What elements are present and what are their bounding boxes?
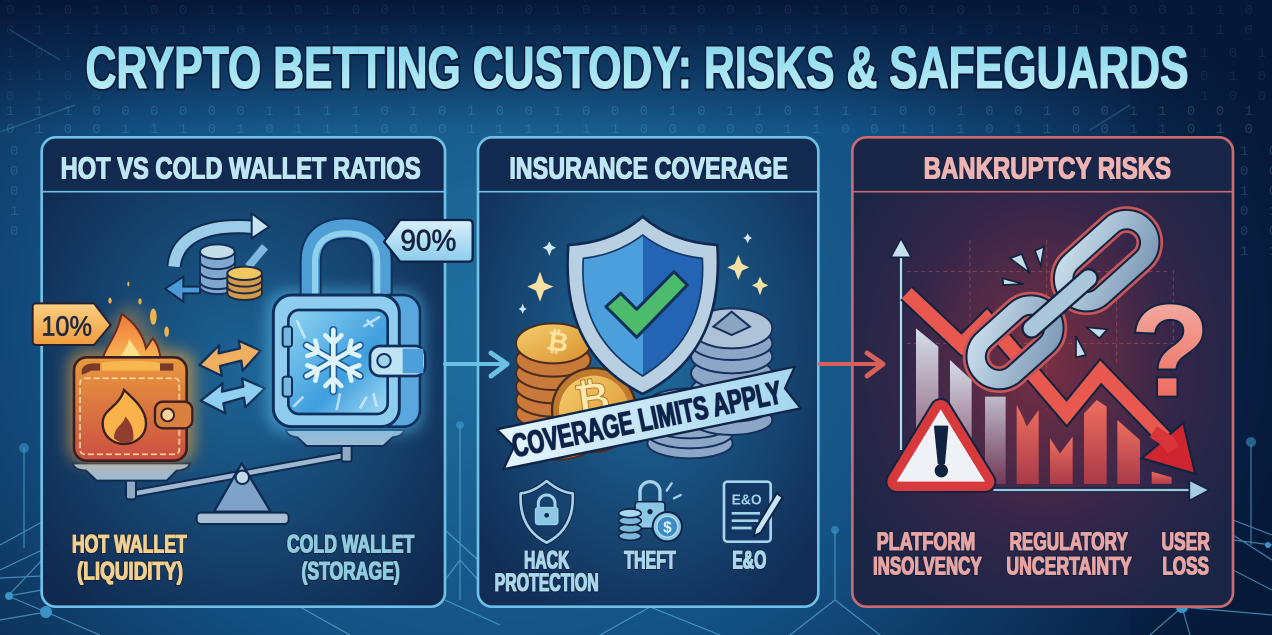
icon: hack protection [521,481,573,543]
callout: 10%: 10% [41,310,92,341]
callout: 10% [33,303,111,345]
label: theft: THEFT [624,546,676,574]
icon: theft [619,482,682,541]
arrow: insurance to bankruptcy [820,353,883,376]
label: platform insolvency: INSOLVENCY [873,552,982,580]
chart: falling bars [907,240,1180,484]
icon: cold safe with padlock [267,228,425,433]
panel: hot vs cold wallet ratios [33,137,473,607]
label: user loss: USER [1161,528,1210,556]
label: hack protection: HACK [524,546,570,574]
icon: errors and omissions document: E&O [732,493,762,509]
background: 0 1 0 0 [6,89,107,105]
label: user loss [1161,528,1210,580]
background: 1 1 0 1 [6,69,107,85]
heading: hot vs cold: HOT VS COLD WALLET RATIOS [61,151,421,185]
icon: silver coin stacks [647,308,772,458]
banner: coverage limits apply [497,367,801,469]
heading: insurance: INSURANCE COVERAGE [509,151,788,185]
label: cold wallet [287,531,415,585]
icon: falling arrow [907,293,1195,474]
label: platform insolvency: PLATFORM [877,528,975,556]
background: 0 [10,224,24,240]
label: hot wallet: HOT WALLET [72,531,187,559]
icon: gold coin stack [516,323,591,460]
icon: warning triangle [897,409,985,482]
icon: gold coin stack: ₿ [545,325,570,358]
background: 1 [10,204,24,220]
label: e&o: E&O [732,546,766,574]
background: 0 [10,184,24,200]
icon: hot wallet [68,282,195,463]
banner: coverage limits apply: COVERAGE LIMITS APPLY [509,374,785,464]
heading: bankruptcy: BANKRUPTCY RISKS [924,151,1171,185]
label: regulatory uncertainty: UNCERTAINTY [1006,552,1132,580]
callout: 90% [384,220,473,262]
arrow: hot/cold to insurance [445,353,507,376]
label: regulatory uncertainty [1006,528,1132,580]
label: cold wallet: (STORAGE) [301,557,400,585]
icon: front bitcoin [552,368,636,452]
label: regulatory uncertainty: REGULATORY [1009,528,1128,556]
label: hot wallet [72,531,187,585]
icon: shield with check [568,217,718,394]
label: platform insolvency [873,528,982,580]
icon: errors and omissions document [724,482,783,542]
label: hack protection: PROTECTION [495,569,599,597]
icon: scale [73,430,404,524]
background: 1 0 1 1 [6,46,107,62]
background: 0 [10,164,24,180]
icon: double arrows [199,341,265,413]
icon: rotation arrows and coins [165,213,269,302]
icon: broken chain [967,210,1159,389]
callout: 90%: 90% [400,225,456,258]
label: cold wallet: COLD WALLET [287,531,415,559]
background: 0 [10,144,24,160]
icon: axes [891,238,1209,501]
icon: question mark: ? [1130,278,1210,424]
icon: sparkles [519,233,768,314]
label: hot wallet: (LIQUIDITY) [77,557,183,585]
label: hack protection [495,546,599,597]
panel: insurance coverage [478,137,818,607]
icon: theft: $ [663,519,672,536]
icon: front bitcoin: ₿ [571,373,613,426]
panel: bankruptcy risks [852,137,1233,607]
label: user loss: LOSS [1162,552,1209,580]
